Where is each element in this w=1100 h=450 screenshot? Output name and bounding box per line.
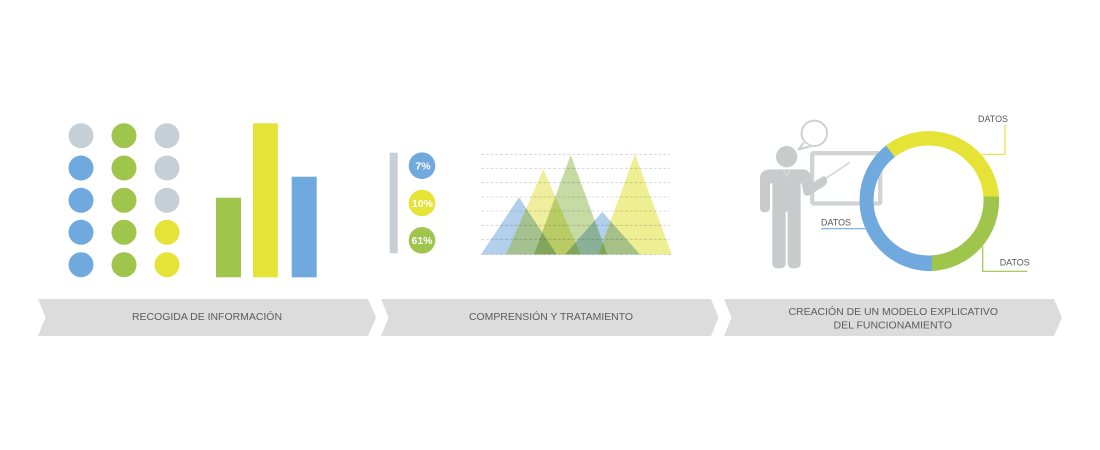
callout: yellow data label	[978, 114, 1008, 154]
process step 1	[38, 299, 376, 336]
panel: data collection dots	[68, 123, 180, 277]
process step 1: RECOGIDA DE INFORMACIÓN	[132, 310, 282, 323]
callout: yellow data label: DATOS	[978, 114, 1008, 125]
process step 2: COMPRENSIÓN Y TRATAMIENTO	[469, 310, 633, 323]
percentage legend: 61%	[411, 235, 433, 247]
process step 3	[724, 299, 1062, 336]
bar chart	[216, 123, 317, 277]
icon: pointer	[825, 162, 850, 179]
icon: presenter with board	[760, 121, 880, 268]
process step 2	[381, 299, 718, 336]
process step 3: CREACIÓN DE UN MODELO EXPLICATIVO	[788, 305, 998, 318]
process step 3: DEL FUNCIONAMIENTO	[834, 320, 952, 332]
percentage legend	[390, 152, 435, 254]
callout: green data label	[983, 246, 1030, 271]
icon: person	[760, 146, 827, 268]
percentage legend: 7%	[415, 160, 431, 172]
donut chart	[860, 131, 999, 271]
icon: speech bubble	[798, 121, 827, 150]
callout: blue data label: DATOS	[821, 218, 851, 228]
triangle area chart	[481, 154, 672, 254]
icon: board	[812, 153, 880, 204]
callout: green data label: DATOS	[1000, 258, 1030, 268]
percentage legend: 10%	[412, 198, 434, 210]
